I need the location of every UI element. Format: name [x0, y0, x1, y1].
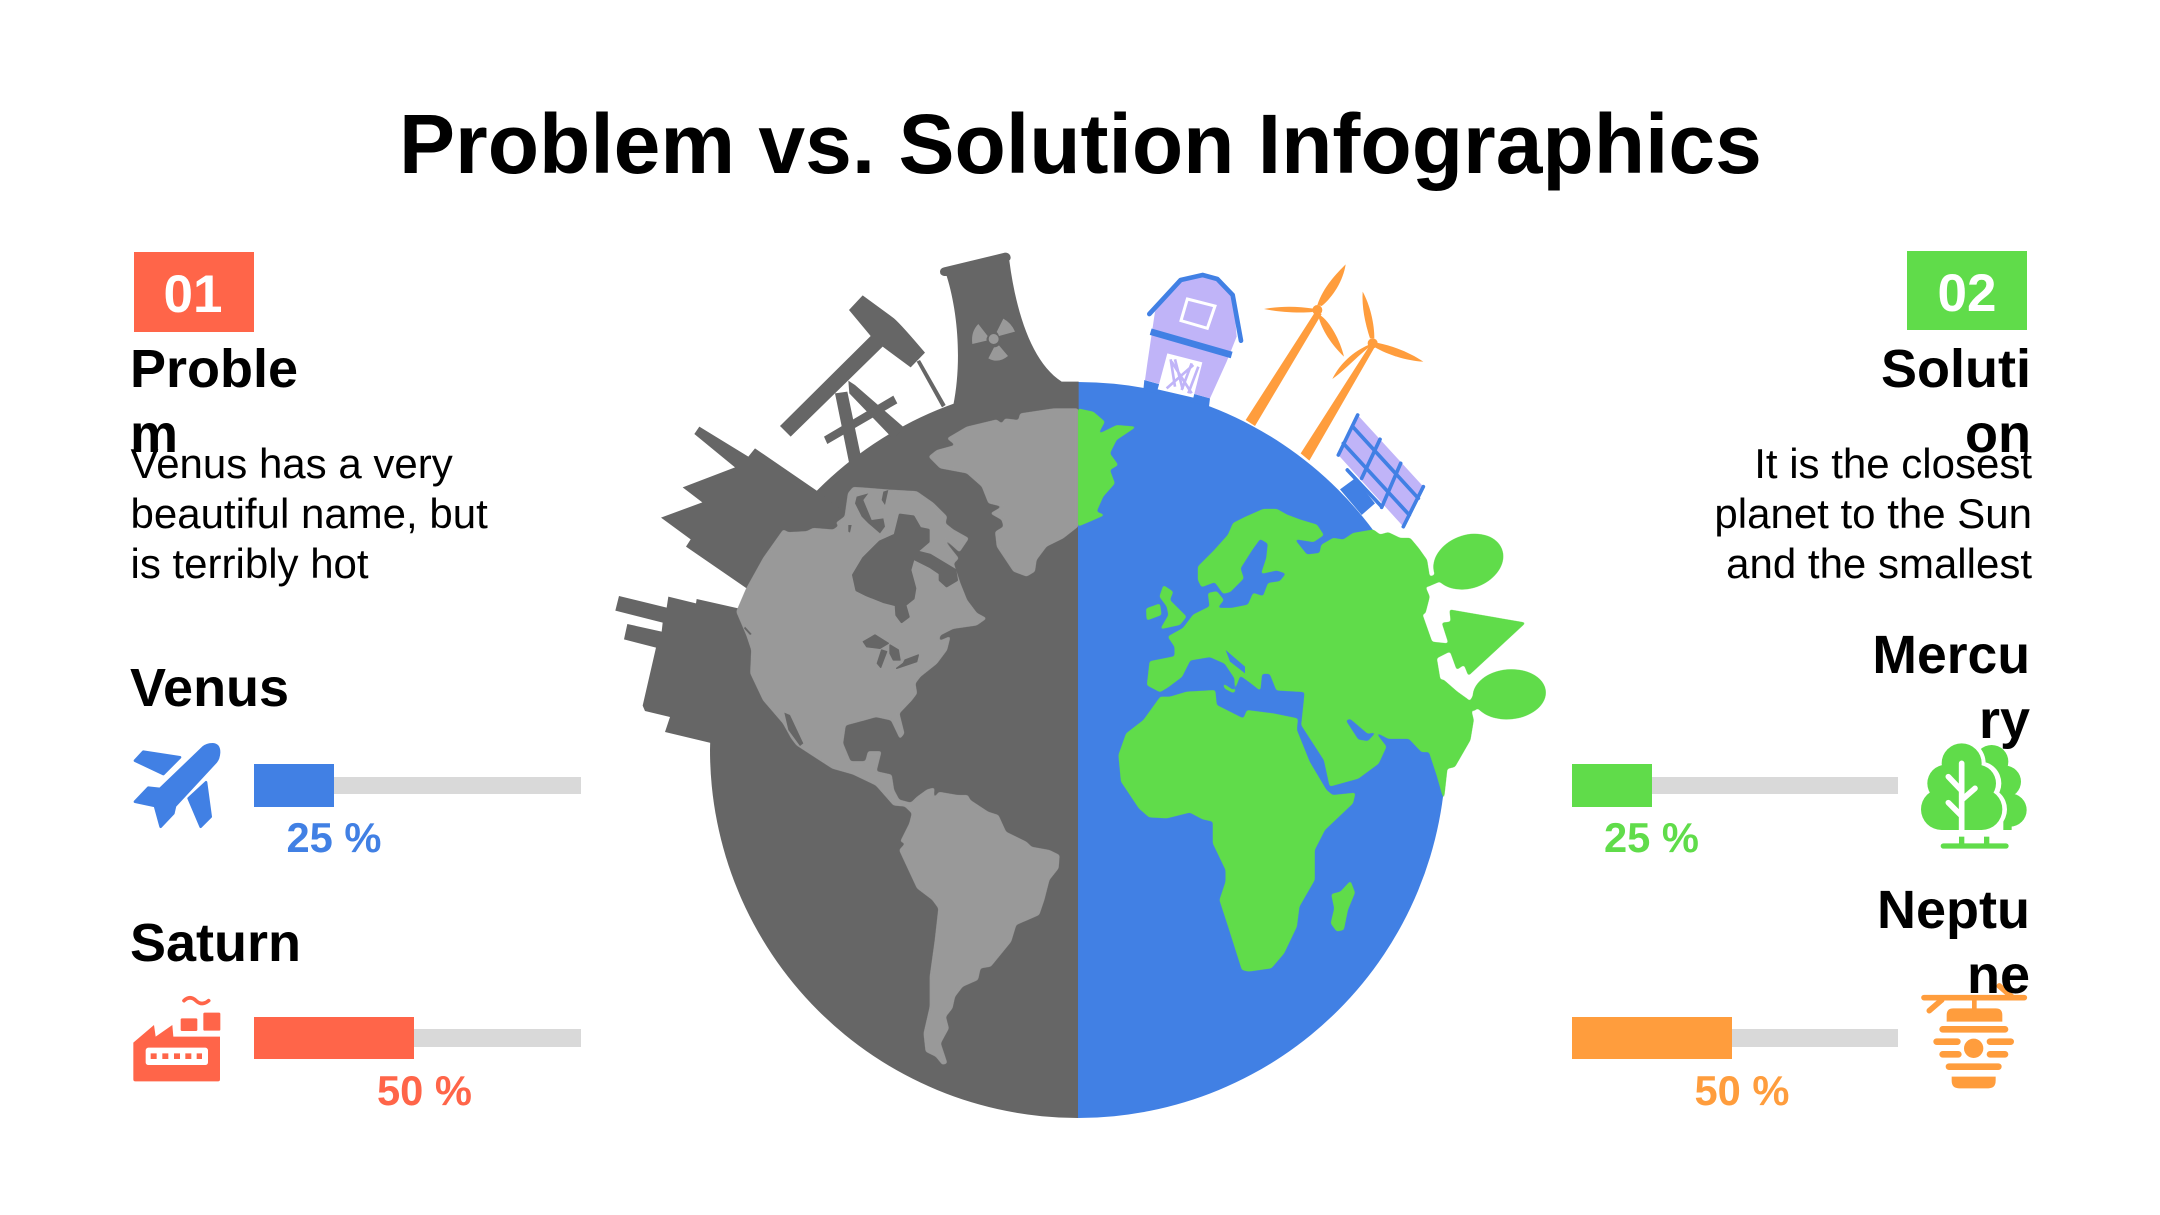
label: Neptune — [1877, 880, 2030, 1005]
label: Mercury: Mercu — [1872, 626, 2030, 685]
Great Lakes — [863, 635, 918, 668]
value: 25%: 25 % — [1604, 814, 1699, 861]
icon: beehive — [1924, 986, 2024, 1088]
bar: Venus 25% — [254, 764, 581, 807]
pollution silhouettes — [615, 253, 1079, 750]
bar: Neptune 50% — [1572, 1017, 1898, 1059]
icon: tree — [1921, 739, 2027, 846]
icon: conifer tree — [1432, 609, 1526, 676]
inland waters of North America — [744, 490, 957, 746]
Arctic channels — [848, 490, 888, 533]
text: solution description: planet to the Sun — [1714, 490, 2032, 537]
icon: wind turbine one — [1246, 264, 1346, 426]
Adriatic Sea — [1226, 650, 1245, 673]
label: Mercury: ry — [1979, 690, 2030, 750]
text: solution description: and the smallest — [1726, 540, 2032, 587]
label: Neptune: ne — [1967, 945, 2030, 1005]
label: Mercury — [1872, 626, 2030, 750]
icon: barn — [1143, 275, 1241, 407]
icon: factory with chimney — [661, 427, 867, 588]
icon: round tree bottom — [1468, 666, 1548, 722]
icon: round tree top — [1425, 524, 1511, 599]
icon: airplane — [135, 744, 219, 827]
continents on solution side — [1078, 408, 1548, 972]
icon: solar panel — [1338, 415, 1423, 527]
continent: South America — [899, 787, 1060, 1065]
text: problem description: Venus has a very — [130, 440, 453, 487]
badge 01 — [134, 252, 254, 332]
panel: problem column — [130, 252, 581, 1114]
continents on problem side — [737, 408, 1078, 1065]
continent: Eurasia with tree silhouettes — [1146, 509, 1548, 798]
continent: Greenland left — [928, 408, 1078, 577]
heading: Problem: Proble — [130, 339, 298, 399]
heading: Solution — [1881, 339, 2031, 464]
title: Problem vs. Solution Infographics — [399, 97, 1762, 191]
text: solution description: It is the closest — [1754, 440, 2032, 487]
text: problem description — [130, 440, 488, 587]
value: 25%: 25 % — [286, 814, 381, 861]
bar: Saturn 50% — [254, 1017, 581, 1059]
icon: wind turbine two — [1301, 292, 1423, 461]
continent: Africa — [1118, 690, 1356, 972]
continent: Madagascar — [1331, 881, 1355, 932]
text: problem description: beautiful name, but — [130, 490, 488, 537]
globe illustration — [615, 253, 1548, 1118]
icon: oil pump jack — [780, 295, 946, 467]
globe right half: solution — [1078, 382, 1446, 1118]
badge 02: 02 — [1938, 264, 1996, 323]
text: problem description: is terribly hot — [130, 540, 369, 587]
heading: Solution: Soluti — [1881, 339, 2031, 399]
label: Neptune: Neptu — [1877, 880, 2030, 940]
badge 02 — [1907, 251, 2027, 330]
badge 01: 01 — [164, 265, 222, 324]
icon: power plant — [615, 596, 833, 750]
heading: Problem: m — [130, 404, 178, 464]
renewable energy icons — [1143, 264, 1423, 527]
Hudson Bay — [853, 515, 957, 622]
British Isles — [1146, 585, 1187, 629]
icon: nuclear cooling tower — [933, 253, 1079, 430]
value: 50%: 50 % — [1694, 1067, 1789, 1114]
label: Saturn: Saturn — [130, 913, 301, 973]
label: Venus: Venus — [130, 658, 289, 718]
value: 50%: 50 % — [377, 1067, 472, 1114]
icon: factory — [133, 998, 220, 1081]
globe left half: problem — [710, 382, 1078, 1118]
continent: Greenland right — [1078, 408, 1137, 527]
panel: solution column — [1572, 251, 2032, 1114]
text: solution description — [1714, 440, 2032, 587]
bar: Mercury 25% — [1572, 764, 1898, 807]
continent: North America — [737, 487, 986, 806]
heading: Solution: on — [1965, 404, 2031, 464]
Gulf of California — [744, 627, 803, 746]
heading: Problem — [130, 339, 298, 464]
